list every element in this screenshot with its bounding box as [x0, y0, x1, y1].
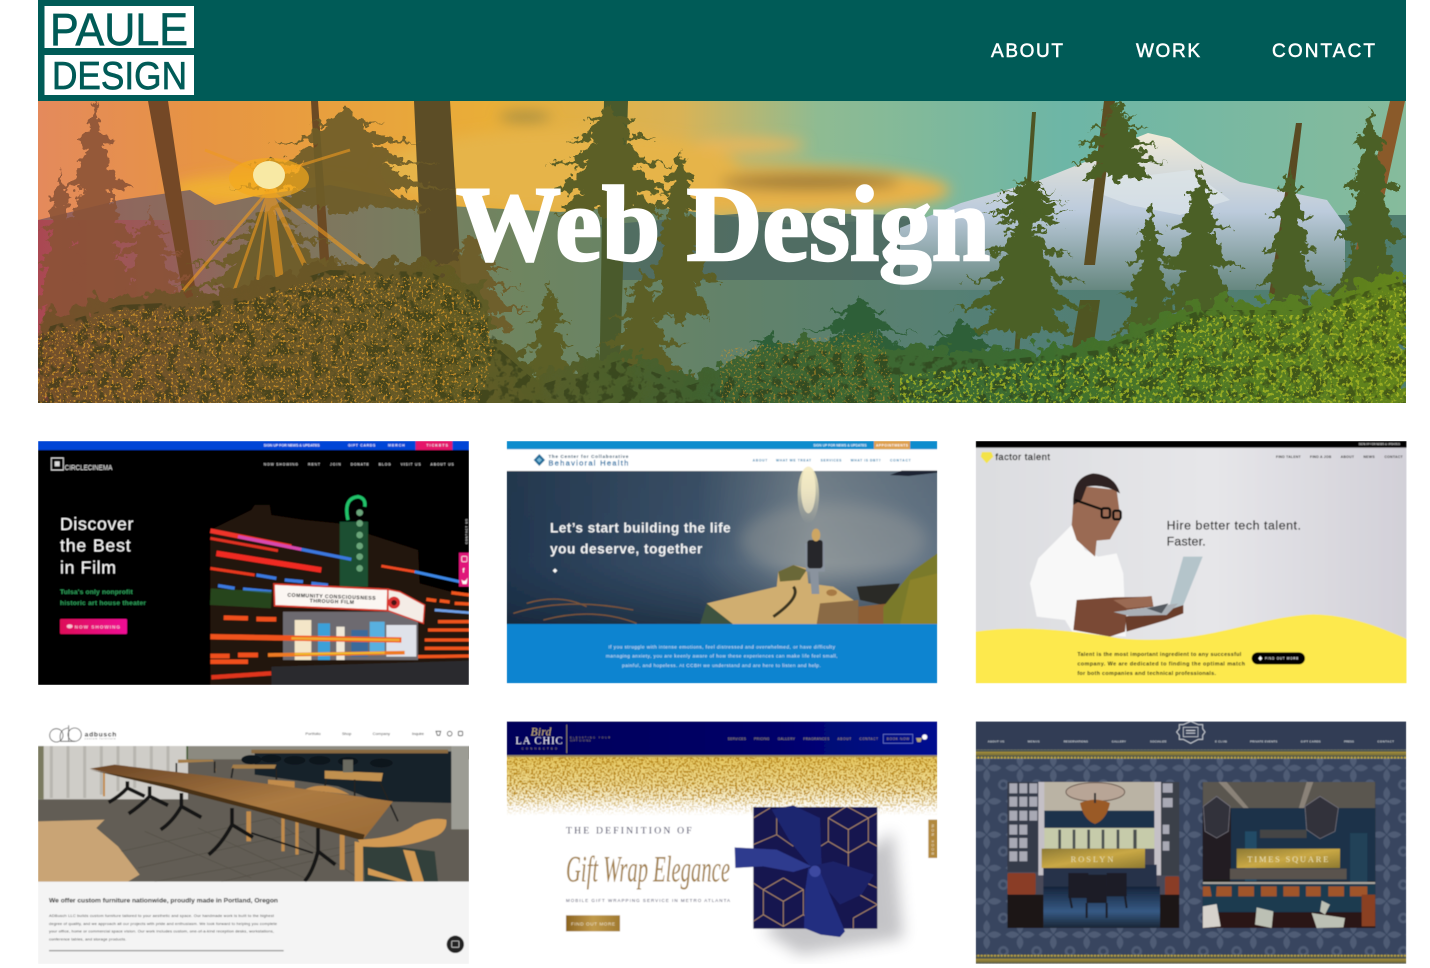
- card: Factor Talent website: [976, 441, 1407, 683]
- card: restaurant website with two locations: ABOUT US: [988, 740, 1004, 744]
- logo: La Chic: Bird: [531, 726, 552, 738]
- marquee sign: [274, 584, 425, 623]
- table legs: [109, 781, 335, 881]
- headline: THE DEFINITION OF: [566, 826, 692, 837]
- sun and rays: [180, 148, 373, 292]
- rug: [38, 820, 140, 882]
- card: Bird La Chic website: GALLERY: [778, 737, 796, 741]
- photo: Roslyn dining room: [1007, 782, 1179, 928]
- logo: La Chic: [515, 725, 610, 753]
- card: Circle Cinema website: DONATE: [351, 462, 369, 466]
- headline: Let’s start building the life: [550, 520, 731, 535]
- card: ADBusch website: Shop: [342, 731, 352, 736]
- conifer foliage: [38, 101, 1406, 380]
- logo: La Chic: ELEVATING YOUR: [570, 736, 610, 739]
- social sidebar: CONTACT US: [465, 519, 469, 544]
- side tab: book now: [928, 820, 937, 858]
- card: Factor Talent website: ABOUT: [1341, 455, 1355, 459]
- banner: Times Square: TIMES SQUARE: [1247, 855, 1328, 864]
- card: restaurant website with two locations: E CLUB: [1215, 740, 1228, 744]
- logo: La Chic: GIFT GIVING: [570, 739, 591, 742]
- figure with backpack and dog: [805, 529, 837, 596]
- navigation: ABOUT: [991, 41, 1063, 62]
- banner: Roslyn: ROSLYN: [1071, 855, 1113, 864]
- logo emblem: [1177, 721, 1205, 743]
- card: Circle Cinema website: BLOG: [379, 462, 391, 466]
- card: restaurant website with two locations: GALLERY: [1112, 740, 1126, 744]
- card: ADBusch website: Company: [373, 731, 390, 736]
- card: Factor Talent website: NEWS: [1363, 455, 1375, 459]
- text panel: [38, 882, 469, 964]
- marquee sign: THROUGH FILM: [310, 598, 354, 606]
- card: Circle Cinema website: [38, 441, 469, 685]
- logo: Paule Design: PAULE: [50, 4, 188, 55]
- card: restaurant website with two locations: SOCIALIZE: [1150, 740, 1167, 744]
- card: Center for Collaborative Behavioral Health website: WHAT IS DBT?: [851, 458, 881, 462]
- card: Factor Talent website: SIGN UP FOR NEWS & UPDATES: [1359, 442, 1400, 446]
- card: Circle Cinema website: TICKETS: [426, 444, 449, 448]
- card: Center for Collaborative Behavioral Health website: SERVICES: [821, 458, 842, 462]
- banner: Times Square: [1237, 849, 1340, 868]
- text panel: your office, home or commercial space vision. Our work includes custom, one-of-a-kind reception desks, workstations,: [49, 929, 274, 934]
- headline: [60, 514, 133, 577]
- card: Circle Cinema website: RENT: [308, 462, 321, 466]
- blue intro band: [507, 624, 937, 683]
- text panel: conference tables, and storage products.: [49, 936, 126, 941]
- banner: Roslyn: [1042, 849, 1145, 868]
- logo: La Chic: CONNECTED: [522, 747, 557, 751]
- subheading: [60, 589, 146, 607]
- title: Web Design: [456, 166, 990, 284]
- logo: factor talent: [981, 452, 1050, 463]
- headline: [1167, 520, 1300, 546]
- armchair: [355, 819, 446, 882]
- card: ADBusch website: Inquire: [412, 731, 425, 736]
- marquee sign: COMMUNITY CONSCIOUSNESS: [287, 593, 376, 602]
- card: Circle Cinema website: ABOUT US: [430, 462, 454, 466]
- logo: factor talent: factor talent: [995, 452, 1050, 462]
- card: restaurant website with two locations: MENUS: [1028, 740, 1040, 744]
- headline: Faster.: [1167, 534, 1206, 548]
- hero banner: forest and mountain sunset: [25, 100, 1417, 420]
- blue intro band: painful, and hopeless. At CCBH we understand and are here to listen and help.: [622, 663, 821, 669]
- button: find out more: [566, 915, 620, 931]
- photo: Times Square bar: [1203, 782, 1375, 928]
- button: now showing: NOW SHOWING: [75, 625, 120, 630]
- photo: live-edge dining table: [38, 746, 471, 882]
- card: Center for Collaborative Behavioral Health website: APPOINTMENTS: [876, 444, 909, 448]
- logo: Circle Cinema: CIRCLECINEMA: [65, 465, 113, 472]
- card: Circle Cinema website: JOIN: [330, 462, 341, 466]
- logo: adbusch: [50, 725, 116, 742]
- card: Bird La Chic website: [507, 721, 937, 964]
- card: Circle Cinema website: VISIT US: [401, 462, 421, 466]
- gift box with ribbon: [735, 805, 903, 955]
- logo: Circle Cinema: [51, 458, 113, 472]
- social sidebar: [459, 519, 469, 587]
- side tab: book now: BOOK NOW: [931, 823, 935, 855]
- button: find out more: [1252, 652, 1305, 664]
- subheading: historic art house theater: [60, 600, 146, 607]
- blue intro band: If you struggle with intense emotions, feel distressed and overwhelmed, or have difficulty: [608, 645, 836, 651]
- card: restaurant website with two locations: [976, 721, 1406, 964]
- card: Center for Collaborative Behavioral Health website: WHAT WE TREAT: [776, 458, 811, 462]
- headline: in Film: [60, 557, 116, 577]
- yellow wave section: [976, 614, 1407, 683]
- photo: man with laptop: [1030, 473, 1203, 637]
- photo: person looking over water: [507, 467, 937, 624]
- card: Center for Collaborative Behavioral Health website: SIGN UP FOR NEWS & UPDATES: [813, 444, 867, 448]
- logo: adbusch: adbusch: [85, 731, 116, 738]
- headline: MOBILE GIFT WRAPPING SERVICE IN METRO ATLANTA: [566, 898, 730, 903]
- logo: Paule Design: DESIGN: [52, 55, 187, 98]
- gold glitter: [507, 757, 937, 816]
- card: restaurant website with two locations: GIFT CARDS: [1301, 740, 1321, 744]
- button: find out more: FIND OUT MORE: [1265, 657, 1298, 661]
- header bar: [38, 0, 1406, 101]
- card: Circle Cinema website: SIGN UP FOR NEWS & UPDATES: [264, 444, 320, 448]
- tree trunks: [148, 101, 1405, 361]
- logo: behavioral health: The Center for Collaborative: [548, 454, 629, 459]
- card: restaurant website with two locations: PRESS: [1344, 740, 1354, 744]
- card: ADBusch website: Portfolio: [305, 731, 321, 736]
- card: Bird La Chic website: SERVICES: [728, 737, 747, 741]
- card: Factor Talent website: FIND A JOB: [1310, 455, 1332, 459]
- photo: neon theater at night: [210, 497, 469, 685]
- table top: [90, 765, 393, 840]
- card: ADBusch website: [38, 721, 471, 964]
- logo: Paule Design: [44, 4, 194, 98]
- card: Bird La Chic website: CONTACT: [859, 737, 878, 741]
- card: Factor Talent website: FIND TALENT: [1276, 455, 1302, 459]
- logo: La Chic: LA CHIC: [515, 736, 563, 747]
- headline: Discover: [60, 514, 133, 534]
- wooden chairs: [103, 773, 350, 870]
- card: Bird La Chic website: FRAGRANCES: [803, 737, 830, 741]
- card: restaurant website with two locations: PRIVATE EVENTS: [1250, 740, 1277, 744]
- headline: [550, 520, 731, 556]
- button: find out more: FIND OUT MORE: [571, 921, 615, 926]
- text panel: degree of quality, and we approach all our projects with pride and enthusiasm. We look forward to helping you complete: [49, 921, 278, 926]
- card: restaurant website with two locations: RESERVATIONS: [1064, 740, 1088, 744]
- card: Center for Collaborative Behavioral Health website: CONTACT: [890, 458, 911, 462]
- card: Circle Cinema website: GIFT CARDS: [348, 444, 376, 448]
- headline: [566, 826, 730, 903]
- logo: behavioral health: [534, 454, 629, 468]
- subheading: Tulsa's only nonprofit: [60, 589, 133, 596]
- yellow wave section: for both companies and technical professionals.: [1077, 671, 1216, 677]
- card: Circle Cinema website: NOW SHOWING: [264, 462, 298, 466]
- card: restaurant website with two locations: CONTACT: [1377, 740, 1394, 744]
- icon: chat button: [447, 936, 464, 953]
- navigation: WORK: [1136, 41, 1200, 62]
- blue intro band: managing anxiety, you are keenly aware of how these experiences can make life feel small,: [606, 654, 837, 660]
- text panel: We offer custom furniture nationwide, proudly made in Portland, Oregon: [49, 898, 278, 905]
- button: now showing: [60, 619, 127, 634]
- logo: behavioral health: Behavioral Health: [548, 459, 628, 468]
- yellow wave section: Talent is the most important ingredient to any successful: [1077, 652, 1242, 658]
- headline: you deserve, together: [550, 541, 703, 556]
- card: Bird La Chic website: ABOUT: [837, 737, 851, 741]
- card: Bird La Chic website: BOOK NOW: [887, 737, 910, 741]
- card: Center for Collaborative Behavioral Health website: [507, 441, 937, 683]
- card: Bird La Chic website: PRICING: [754, 737, 770, 741]
- headline: Gift Wrap Elegance: [566, 849, 730, 890]
- logo: adbusch: custom furniture: [85, 737, 116, 741]
- text panel: ADBusch LLC builds custom furniture tailored to your aesthetic and space. Our handmade work is built to the highest: [49, 913, 275, 918]
- headline: Hire better tech talent.: [1167, 518, 1301, 532]
- navigation: [991, 41, 1375, 62]
- card: Circle Cinema website: MERCH: [388, 444, 405, 448]
- card: Center for Collaborative Behavioral Health website: ABOUT: [753, 458, 767, 462]
- navigation: CONTACT: [1272, 41, 1375, 62]
- social sidebar: f: [462, 568, 465, 575]
- yellow wave section: company. We are dedicated to finding the optimal match: [1077, 662, 1246, 668]
- foreground forest: [38, 260, 1406, 420]
- card: Factor Talent website: CONTACT: [1384, 455, 1404, 459]
- headline: the Best: [60, 536, 131, 556]
